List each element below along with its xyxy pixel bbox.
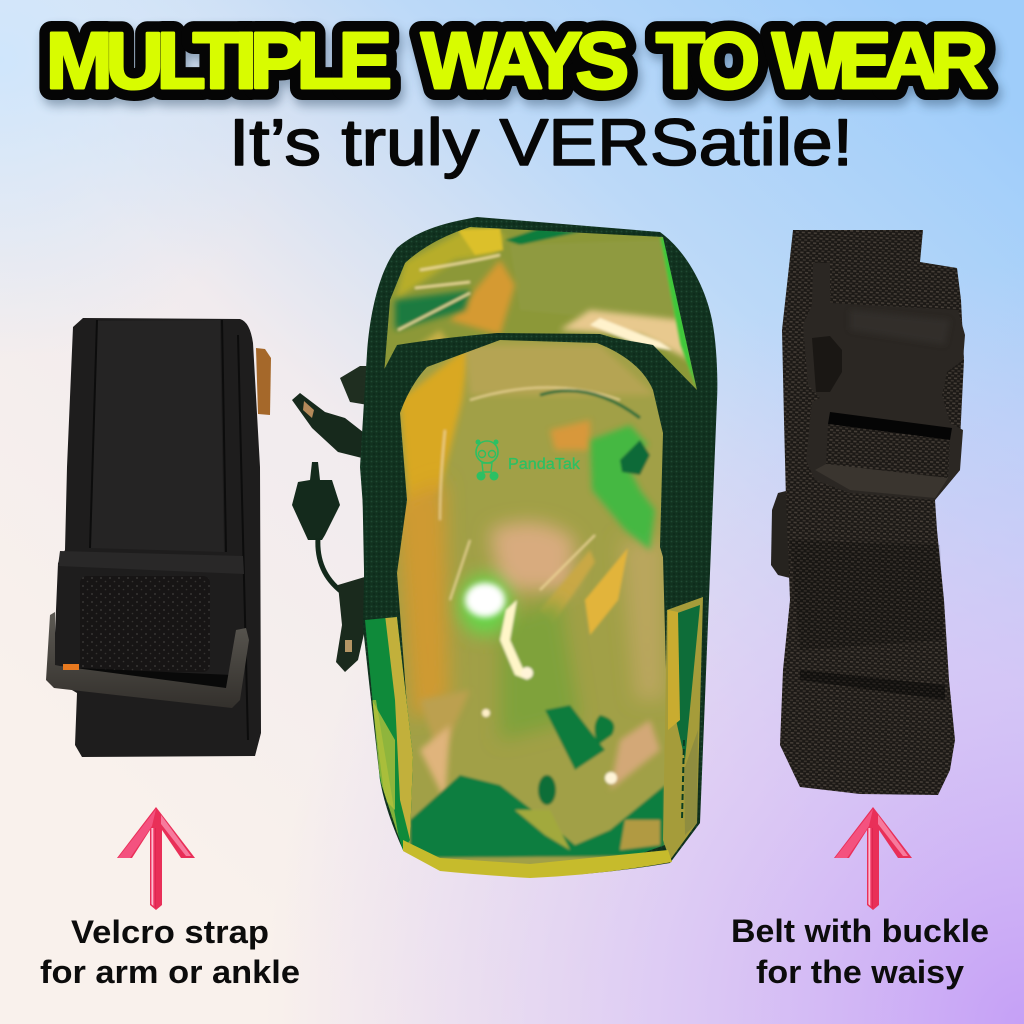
right caption: Belt with buckle [731,913,989,949]
left caption: for arm or ankle [40,954,300,990]
title: TO [659,22,763,111]
title: WAYS [424,22,632,111]
bag photo [292,217,717,878]
plastic clip left [292,462,340,540]
title: TO [656,16,760,105]
bottom rim [403,840,672,878]
title: WEAR [775,22,991,111]
strip under buckle [78,668,232,692]
metal buckle [46,612,249,708]
zipper pull left lower [336,576,368,672]
belt with buckle photo [771,230,965,795]
bag zipper outline [360,217,717,877]
plastic buckle [803,263,965,500]
left side panel [365,617,413,850]
title: WAYS [421,16,629,105]
strap tab [256,348,271,415]
strap cross band [58,551,244,574]
zipper pull left upper [292,393,368,458]
title: MULTIPLE [49,22,395,111]
right caption: for the waisy [756,954,964,990]
strap body [55,318,261,757]
front pocket holographic panel [390,335,670,870]
velcro patch [80,576,210,672]
buckle D opening [812,336,842,392]
orange tag [63,664,79,670]
title: WEAR [772,16,988,105]
velcro strap photo [46,318,271,757]
left caption: Velcro strap [71,914,269,950]
title: WAYS [421,16,629,105]
side tab [771,490,790,578]
title: MULTIPLE [46,16,392,105]
buckle window webbing [826,424,950,478]
title [46,16,991,111]
right side panel [663,597,703,859]
PandaTak logo [476,440,581,480]
title: WEAR [772,16,988,105]
title: TO [656,16,760,105]
belt webbing [780,230,964,795]
left caption [40,914,300,990]
top pocket [384,227,697,390]
front pocket zipper [362,333,705,620]
PandaTak logo: PandaTak [508,456,581,473]
right caption [731,913,989,990]
strap centre panel [90,320,224,552]
buckle slot [828,412,952,440]
title: MULTIPLE [46,16,392,105]
left arrow [117,807,195,910]
right arrow [834,807,912,910]
subtitle: It’s truly VERSatile! [229,105,853,179]
